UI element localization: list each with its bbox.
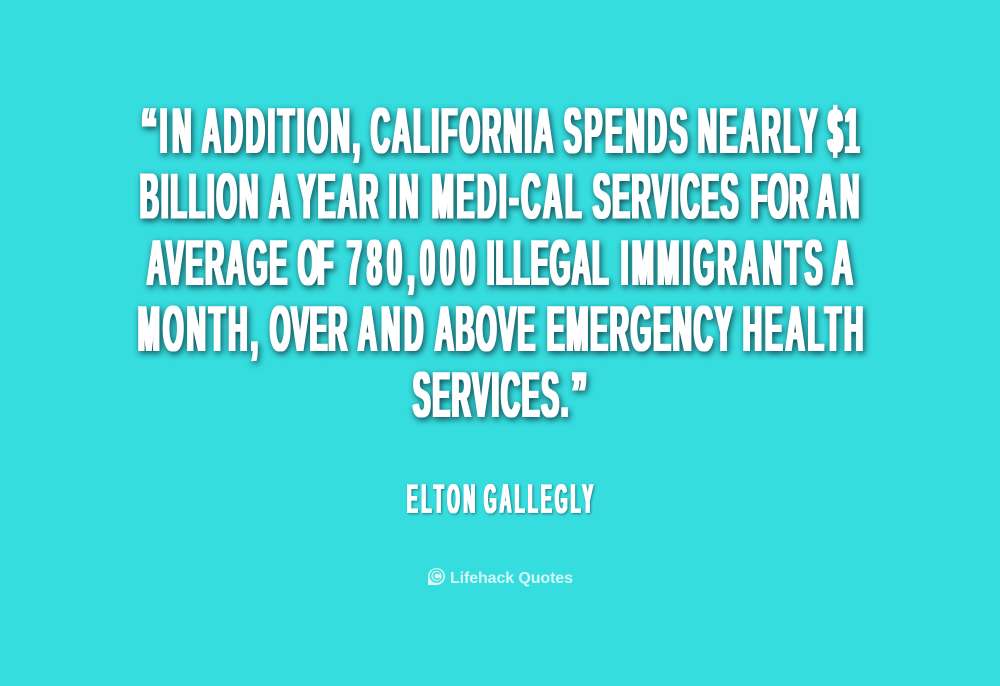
quote text: SERVICES bbox=[593, 161, 738, 233]
quote text: ” bbox=[571, 358, 587, 431]
brand wordmark: Lifehack Quotes bbox=[450, 570, 573, 587]
quote text: BILLION bbox=[140, 161, 258, 233]
quote text: OF bbox=[298, 227, 333, 299]
author name bbox=[407, 475, 593, 522]
quote text: ABOVE bbox=[435, 293, 535, 365]
brand logo bbox=[428, 568, 573, 587]
quote text: MEDI-CAL bbox=[432, 161, 581, 233]
quote text: FOR bbox=[751, 161, 808, 233]
quote text: “ bbox=[141, 94, 157, 167]
quote text: NEARLY bbox=[698, 95, 817, 167]
quote text: EMERGENCY bbox=[547, 293, 732, 365]
quote text: SPENDS bbox=[564, 95, 687, 167]
author name: ELTON bbox=[407, 475, 475, 522]
quote text: 780,000 bbox=[347, 227, 475, 299]
quote text: AN bbox=[817, 161, 859, 233]
quote text: ADDITION, bbox=[202, 95, 360, 167]
quote text: MONTH, bbox=[138, 293, 258, 365]
quote text: A bbox=[832, 227, 853, 299]
quote text: ILLEGAL bbox=[487, 227, 608, 299]
quote text: AND bbox=[358, 293, 423, 365]
quote text: IN bbox=[389, 161, 418, 233]
quote text: YEAR bbox=[298, 161, 378, 233]
quote text: SERVICES. bbox=[413, 359, 568, 431]
quote text: AVERAGE bbox=[147, 227, 287, 299]
quote text bbox=[138, 94, 863, 431]
icon: speech bubble swirl bbox=[428, 568, 445, 585]
author name: GALLEGLY bbox=[484, 475, 593, 522]
quote text: OVER bbox=[270, 293, 347, 365]
quote text: HEALTH bbox=[743, 293, 863, 365]
quote text: IN bbox=[160, 95, 191, 167]
quote text: $1 bbox=[828, 95, 859, 167]
quote text: IMMIGRANTS bbox=[621, 227, 822, 299]
quote text: CALIFORNIA bbox=[371, 95, 553, 167]
quote text: A bbox=[269, 160, 290, 233]
